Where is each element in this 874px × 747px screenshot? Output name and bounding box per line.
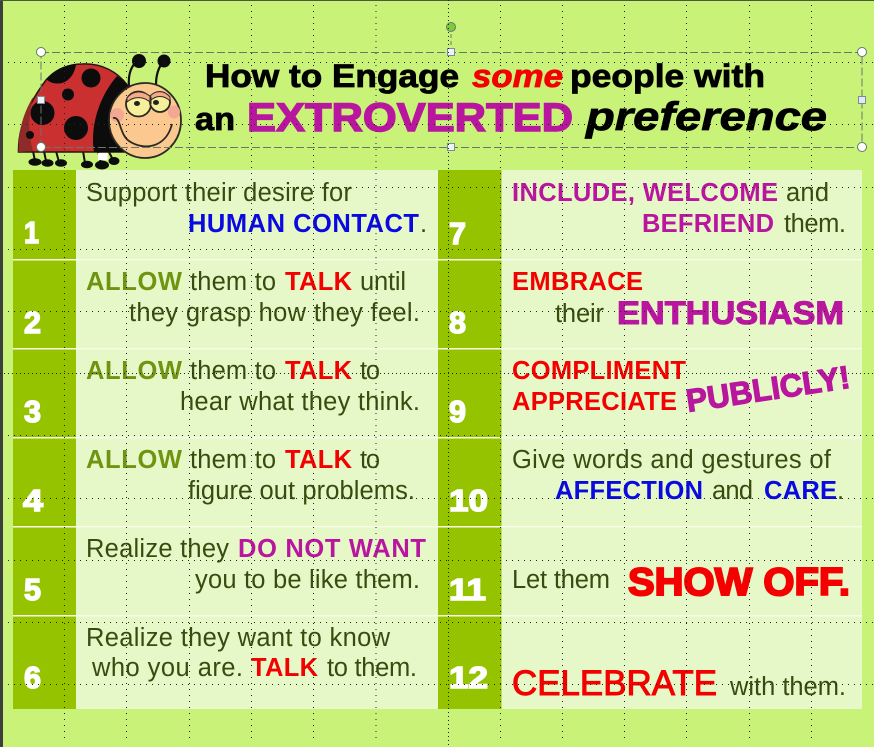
row numbers: left: 5 bbox=[24, 572, 41, 607]
item 4: ALLOW bbox=[86, 446, 183, 474]
item 1: Support their desire for bbox=[86, 179, 352, 207]
icon: ladybug bbox=[18, 54, 181, 170]
item 6 bbox=[86, 624, 417, 682]
item 8 bbox=[512, 268, 844, 331]
item 3: TALK bbox=[285, 357, 353, 385]
item 2: them to bbox=[190, 268, 276, 296]
title line 2: preference bbox=[585, 95, 827, 139]
title line 1: How to Engage bbox=[205, 58, 459, 94]
item 12: CELEBRATE bbox=[512, 664, 717, 703]
item 2: they grasp how they feel. bbox=[129, 299, 420, 327]
title line 1: people with bbox=[570, 58, 765, 94]
title bbox=[195, 58, 827, 140]
item 10: AFFECTION bbox=[555, 477, 703, 505]
item 6: TALK bbox=[251, 654, 319, 682]
row numbers: left: 3 bbox=[24, 394, 41, 429]
item 4: TALK bbox=[285, 446, 353, 474]
item 10: CARE bbox=[764, 477, 837, 505]
item 4 bbox=[86, 446, 415, 505]
item 7 bbox=[512, 179, 846, 238]
row numbers: right: 10 bbox=[449, 483, 488, 518]
title line 1 bbox=[205, 58, 765, 94]
item 6: to them. bbox=[327, 654, 417, 682]
item 1: HUMAN CONTACT bbox=[188, 210, 419, 238]
item 8: ENTHUSIASM bbox=[617, 295, 844, 331]
row numbers: left: 1 bbox=[24, 215, 39, 250]
row numbers: right: 9 bbox=[449, 394, 466, 429]
item 5 bbox=[86, 535, 426, 594]
item 9 bbox=[512, 357, 852, 419]
row numbers: right: 12 bbox=[449, 660, 488, 695]
item 3: ALLOW bbox=[86, 357, 183, 385]
item 10 bbox=[512, 446, 844, 505]
item 2: TALK bbox=[285, 268, 353, 296]
item 11: Let them bbox=[512, 566, 610, 594]
row numbers: right: 7 bbox=[449, 216, 466, 251]
row numbers: right: 11 bbox=[449, 572, 486, 607]
item 6: who you are. bbox=[91, 654, 243, 682]
row numbers: right bbox=[449, 216, 488, 695]
title line 2 bbox=[195, 95, 827, 140]
item 11 bbox=[512, 561, 850, 604]
row numbers: left: 2 bbox=[24, 305, 41, 340]
row numbers: right: 8 bbox=[449, 305, 466, 340]
item 9: PUBLICLY! bbox=[684, 359, 852, 419]
row numbers: left: 6 bbox=[24, 660, 41, 695]
item 10: Give words and gestures of bbox=[512, 446, 832, 474]
item 8: EMBRACE bbox=[512, 268, 643, 296]
title line 2: EXTROVERTED bbox=[247, 96, 573, 140]
item 4: figure out problems. bbox=[188, 477, 415, 505]
item 1: . bbox=[420, 210, 427, 238]
item 10: . bbox=[837, 477, 844, 505]
item 11: SHOW OFF. bbox=[628, 561, 850, 604]
item 7: BEFRIEND bbox=[642, 210, 774, 238]
item 4: to bbox=[360, 446, 380, 474]
row numbers: left bbox=[23, 215, 44, 695]
item 2 bbox=[86, 268, 420, 327]
item 7: them. bbox=[784, 210, 846, 238]
item 1 bbox=[86, 179, 427, 238]
title line 1: some bbox=[472, 58, 563, 94]
item 7: and bbox=[786, 179, 829, 207]
row numbers: left: 4 bbox=[23, 483, 44, 518]
item 7: INCLUDE, WELCOME bbox=[512, 179, 778, 207]
item 8: their bbox=[555, 300, 604, 328]
item 12 bbox=[512, 664, 846, 703]
item 3: them to bbox=[190, 357, 276, 385]
item 3: to bbox=[360, 357, 380, 385]
title line 2: an bbox=[195, 101, 235, 137]
item 9: APPRECIATE bbox=[512, 388, 677, 416]
item 5: you to be like them. bbox=[195, 566, 420, 594]
panel: left table bbox=[13, 170, 438, 709]
item 3 bbox=[86, 357, 420, 416]
selection frame with handles bbox=[36, 22, 866, 152]
item 5: DO NOT WANT bbox=[238, 535, 426, 563]
item 10: and bbox=[712, 477, 753, 505]
item 2: ALLOW bbox=[86, 268, 183, 296]
item 12: with them. bbox=[729, 673, 846, 701]
panel: right table bbox=[438, 170, 862, 709]
item 2: until bbox=[360, 268, 406, 296]
item 3: hear what they think. bbox=[180, 388, 420, 416]
item 6: Realize they want to know bbox=[86, 624, 391, 652]
item 4: them to bbox=[190, 446, 276, 474]
item 9: COMPLIMENT bbox=[512, 357, 686, 385]
item 5: Realize they bbox=[86, 535, 229, 563]
